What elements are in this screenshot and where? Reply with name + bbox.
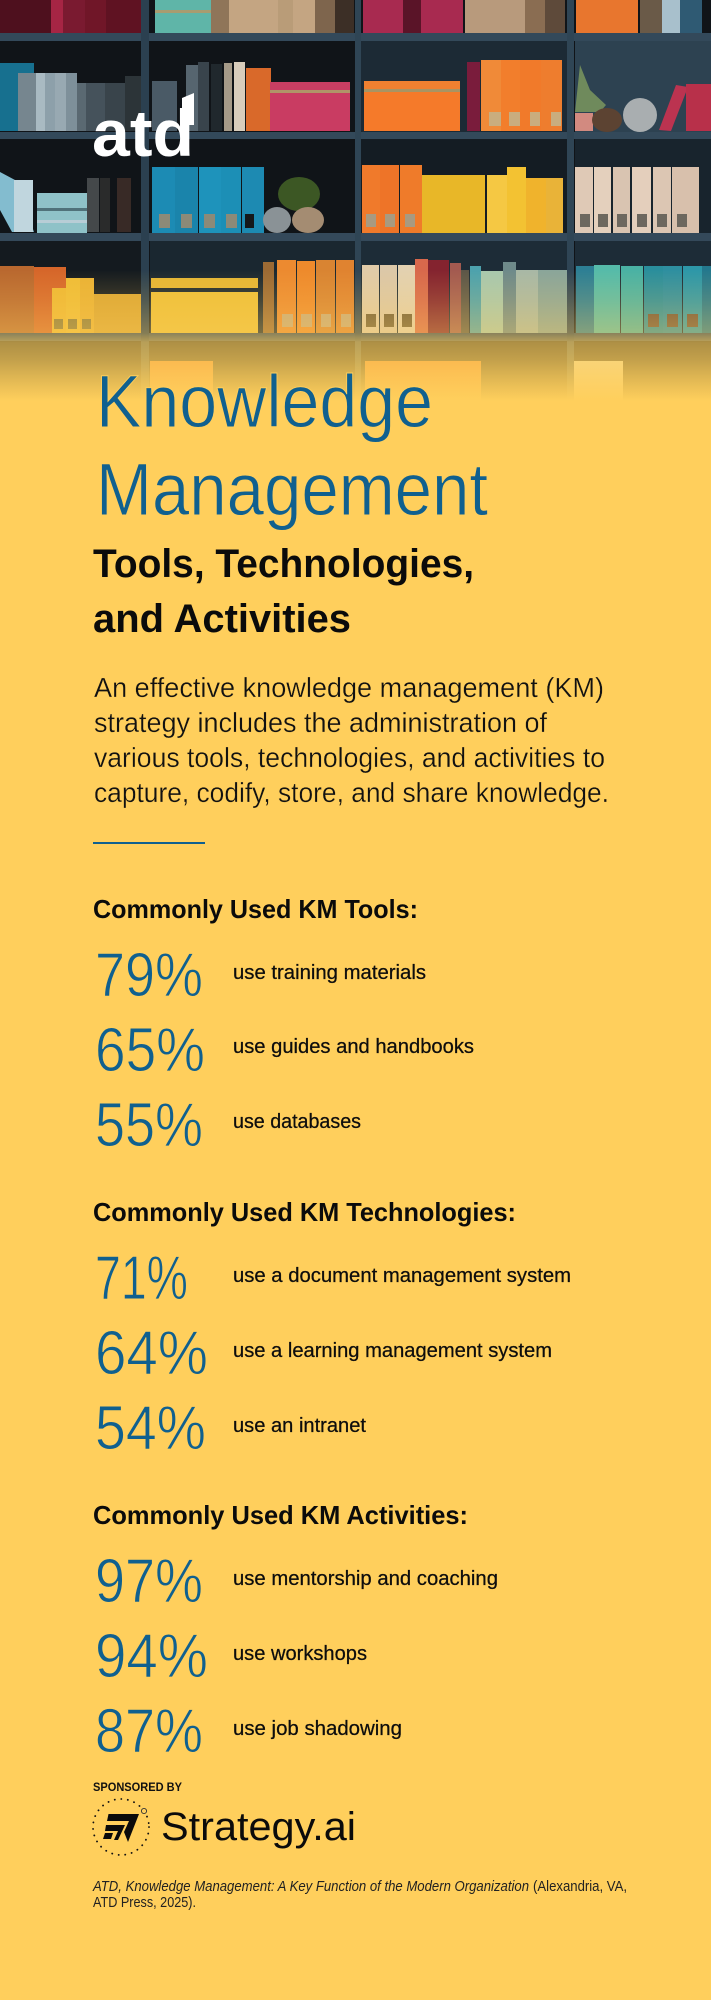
stat: 94% xyxy=(95,1622,367,1691)
stat: 71%: use a document management system xyxy=(233,1265,571,1287)
stat: 54% xyxy=(95,1394,366,1463)
shelf back panels xyxy=(0,0,711,405)
stat: 55%: 55% xyxy=(95,1091,203,1160)
shelf boards and uprights xyxy=(0,0,711,400)
intro paragraph: strategy includes the administration of xyxy=(94,707,547,738)
title: Knowledge xyxy=(96,360,433,443)
sponsor name: Strategy.ai xyxy=(161,1805,356,1849)
stat: 64% xyxy=(95,1319,552,1388)
divider xyxy=(93,842,205,844)
title: Management xyxy=(96,448,488,531)
intro paragraph: capture, codify, store, and share knowledge. xyxy=(94,777,609,808)
stat: 64%: 64% xyxy=(95,1319,208,1388)
bookshelf photo xyxy=(0,0,711,410)
stat: 97%: use mentorship and coaching xyxy=(233,1568,498,1590)
citation: ATD, Knowledge Management: A Key Function of the Modern Organization xyxy=(92,1879,529,1895)
stat: 65% xyxy=(95,1016,474,1085)
stat: 87%: use job shadowing xyxy=(233,1718,402,1740)
intro paragraph: An effective knowledge management (KM) xyxy=(94,672,604,703)
stat: 54%: 54% xyxy=(95,1394,206,1463)
subtitle xyxy=(93,542,474,641)
citation xyxy=(92,1879,627,1911)
row 5 books xyxy=(150,361,623,405)
section: KM tools xyxy=(93,894,474,1160)
citation: ATD Press, 2025). xyxy=(93,1895,196,1911)
sponsor label: SPONSORED BY xyxy=(93,1780,182,1794)
stat: 55%: use databases xyxy=(233,1111,361,1133)
stat: 65%: 65% xyxy=(95,1016,205,1085)
stat: 87%: 87% xyxy=(95,1697,203,1766)
title xyxy=(96,360,488,531)
row 2 books xyxy=(0,60,711,132)
fade to yellow xyxy=(0,270,711,410)
row 1 books xyxy=(0,0,702,35)
stat: 87% xyxy=(95,1697,402,1766)
stat: 71% xyxy=(95,1244,571,1313)
intro paragraph xyxy=(94,672,609,808)
row 4 books xyxy=(0,259,711,333)
subtitle: Tools, Technologies, xyxy=(93,542,474,586)
subtitle: and Activities xyxy=(93,597,351,641)
stat: 97%: 97% xyxy=(95,1547,203,1616)
logo: atd: atd xyxy=(92,96,194,170)
stat: 54%: use an intranet xyxy=(233,1415,366,1437)
stat: 97% xyxy=(95,1547,498,1616)
stat: 65%: use guides and handbooks xyxy=(233,1036,474,1058)
stat: 94%: 94% xyxy=(95,1622,208,1691)
stat: 64%: use a learning management system xyxy=(233,1340,552,1362)
stat: 94%: use workshops xyxy=(233,1643,367,1665)
section: KM activities xyxy=(93,1500,498,1766)
heading: technologies: Commonly Used KM Technologies: xyxy=(93,1197,516,1227)
sponsor logo icon xyxy=(93,1799,149,1855)
stat: 55% xyxy=(95,1091,361,1160)
row 3 books xyxy=(0,165,699,233)
heading: tools: Commonly Used KM Tools: xyxy=(93,894,418,924)
stat: 79%: use training materials xyxy=(233,962,426,984)
stat: 79%: 79% xyxy=(95,941,203,1010)
heading: activities: Commonly Used KM Activities: xyxy=(93,1500,468,1530)
stat: 71%: 71% xyxy=(95,1244,188,1313)
stat: 79% xyxy=(95,941,426,1010)
intro paragraph: various tools, technologies, and activities to xyxy=(94,742,605,773)
section: KM technologies xyxy=(93,1197,571,1463)
citation: (Alexandria, VA, xyxy=(533,1879,627,1895)
